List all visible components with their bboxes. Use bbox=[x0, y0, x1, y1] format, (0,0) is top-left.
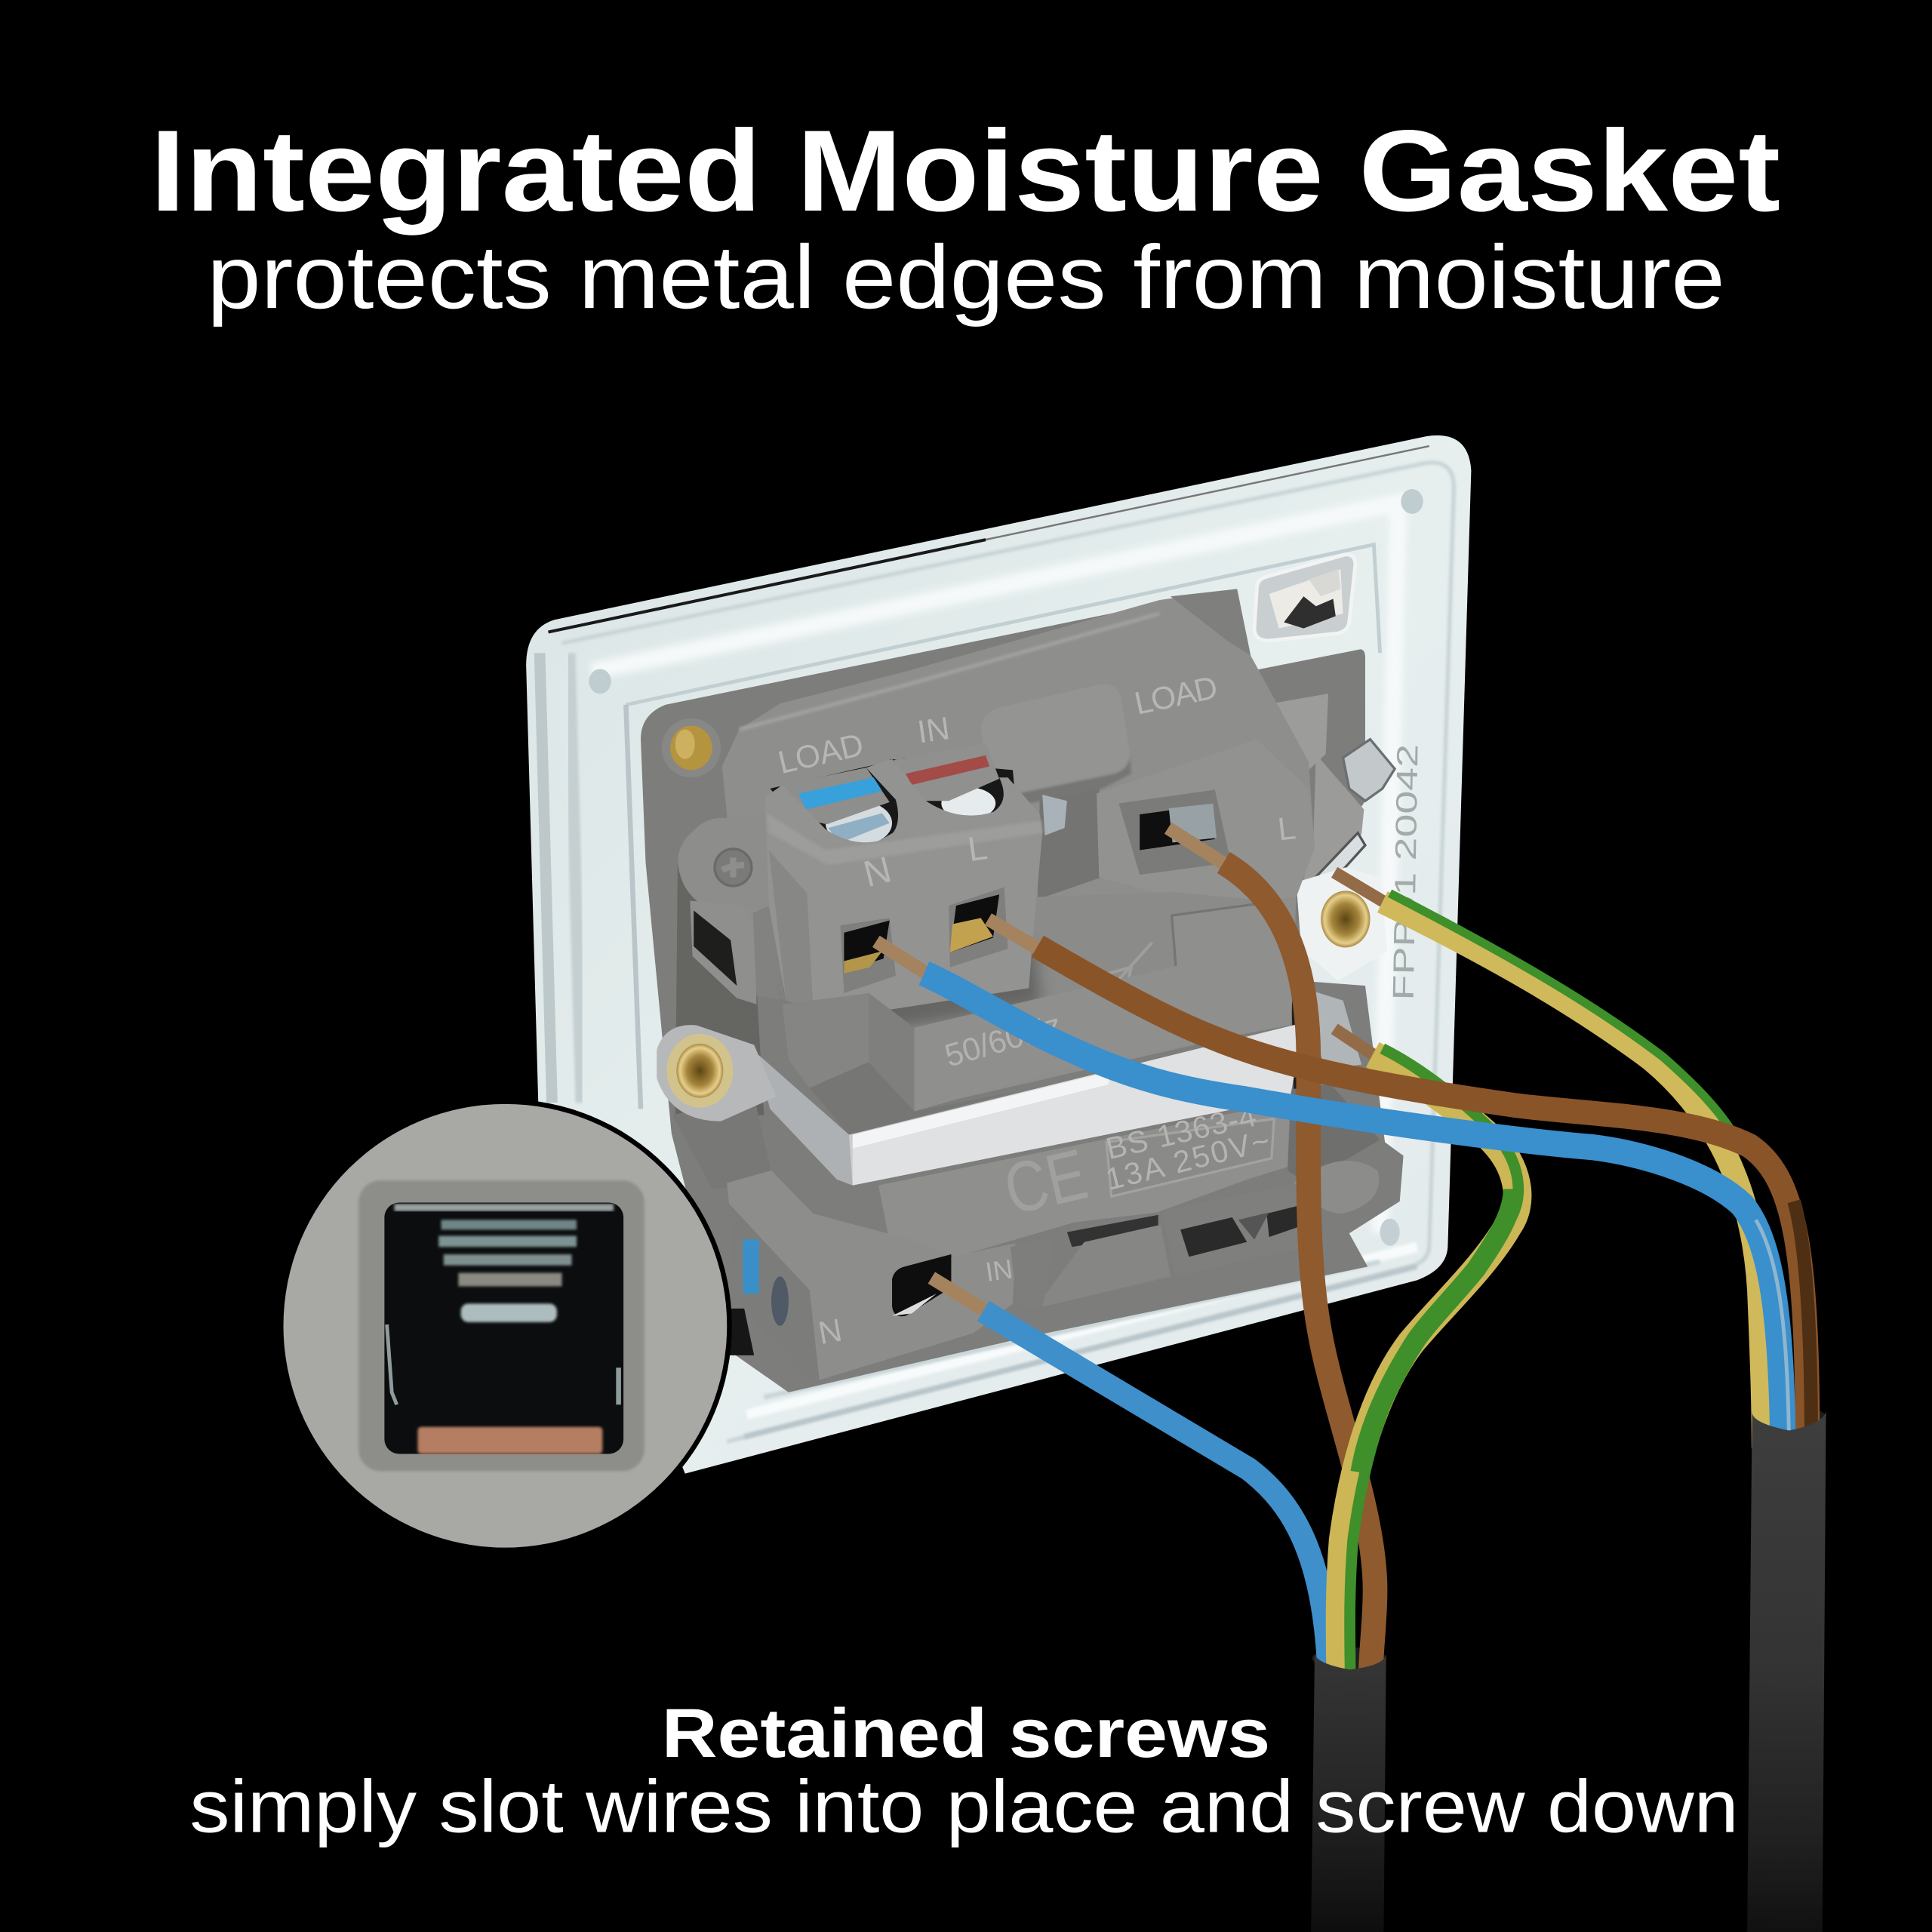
lower terminal block: IN bbox=[983, 1253, 1014, 1287]
left wire entry bbox=[840, 918, 896, 993]
recess around terminal opening bbox=[358, 1180, 645, 1471]
front terminal block: N bbox=[860, 849, 895, 895]
upper terminal housing bbox=[722, 589, 1315, 1109]
moulded labels: IN bbox=[915, 710, 952, 749]
blue N wire bbox=[876, 941, 1789, 1447]
metal square lug bbox=[1254, 555, 1355, 641]
shadow under front block bbox=[789, 949, 1041, 1041]
lower centre body: 50/60Hz bbox=[941, 1007, 1066, 1074]
pivot lug with cross screw bbox=[678, 814, 777, 911]
brown load wire bbox=[1168, 828, 1375, 1694]
engraved code on plate: FPP01 20042 bbox=[1388, 744, 1425, 1001]
left cable back rim bbox=[1312, 1647, 1386, 1669]
right-hand screws and earth tab bbox=[1297, 740, 1395, 1069]
moulded labels bbox=[775, 669, 1297, 847]
moulded labels: LOAD bbox=[1131, 669, 1220, 721]
metal bracket bbox=[657, 1023, 1303, 1186]
terminal colour tags bbox=[783, 743, 999, 824]
left cable sheath bbox=[1311, 1654, 1386, 1932]
brown L wire bbox=[988, 919, 1811, 1447]
moulded labels: LOAD bbox=[775, 727, 866, 780]
front terminal block: L bbox=[965, 828, 989, 869]
caption heading: Retained screws bbox=[662, 1695, 1270, 1772]
magnified inset circle bbox=[278, 1099, 732, 1552]
lower blue wire bbox=[931, 1278, 1330, 1694]
load terminal face bbox=[1097, 740, 1315, 902]
lower clip bbox=[1162, 1183, 1303, 1276]
bin symbol bbox=[1097, 943, 1152, 1011]
side clip bbox=[690, 900, 786, 1004]
rating markings bbox=[997, 1098, 1273, 1230]
front terminal block bbox=[765, 759, 1042, 1019]
rating markings: BS 1363-4 bbox=[1103, 1098, 1260, 1166]
earth wire upper bbox=[1334, 872, 1763, 1447]
brass screw head bbox=[662, 718, 721, 777]
earth wire lower bbox=[1334, 1029, 1518, 1694]
terminal opening bbox=[384, 1202, 623, 1454]
terminal wells and screws bbox=[770, 758, 1067, 851]
right wire entry bbox=[949, 888, 1008, 968]
lower terminal block: N bbox=[816, 1312, 844, 1351]
moulded labels: L bbox=[1276, 810, 1297, 847]
lower centre body bbox=[783, 939, 1291, 1257]
caption body: simply slot wires into place and screw down bbox=[189, 1765, 1739, 1848]
raised cap bbox=[981, 684, 1130, 795]
rating markings: CE bbox=[997, 1134, 1094, 1230]
back frame bbox=[641, 601, 1404, 1392]
subtitle: protects metal edges from moisture bbox=[207, 227, 1725, 328]
lower terminal block bbox=[727, 1171, 1055, 1380]
right cable back rim bbox=[1752, 1406, 1826, 1428]
title: Integrated Moisture Gasket bbox=[150, 106, 1780, 235]
rating markings: 13A 250V~ bbox=[1102, 1123, 1273, 1197]
socket faceplate bbox=[526, 435, 1471, 1474]
brass screw hole bbox=[666, 1034, 733, 1108]
right cable sheath bbox=[1747, 1410, 1826, 1932]
shadow pocket between block and load terminal bbox=[1038, 779, 1102, 900]
